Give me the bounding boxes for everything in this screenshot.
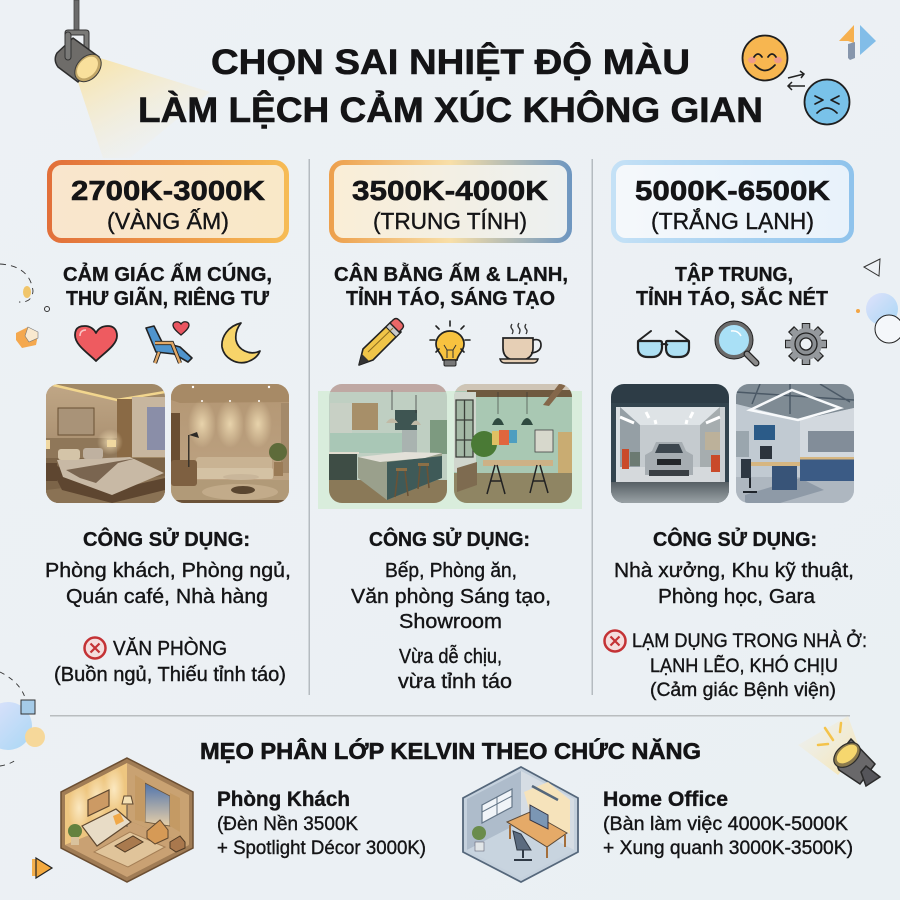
photo: cool garage — [611, 384, 729, 503]
icon: pencil — [359, 318, 404, 365]
icon: happy and unhappy faces — [742, 36, 850, 124]
column 2 usage text: Văn phòng Sáng tạo, — [351, 585, 551, 608]
icon: isometric living room — [61, 758, 193, 882]
column 2 usage text: CÔNG SỬ DỤNG: — [369, 527, 530, 551]
panel: column 3 header: (TRẮNG LẠNH) — [651, 207, 814, 234]
column 1 usage text — [45, 527, 291, 608]
living room tip text: + Spotlight Décor 3000K) — [217, 837, 426, 859]
column 1 usage text: CÔNG SỬ DỤNG: — [83, 527, 250, 551]
column 2 feeling text — [334, 262, 568, 310]
column 2 usage text: Bếp, Phòng ăn, — [385, 559, 517, 582]
icon: floor spotlight — [798, 716, 880, 786]
title — [138, 42, 763, 130]
photo: neutral studio — [454, 384, 572, 503]
column 2 note: vừa tỉnh táo — [398, 671, 512, 693]
column 3 usage text: CÔNG SỬ DỤNG: — [653, 527, 817, 551]
column 3 feeling text: TỈNH TÁO, SẮC NÉT — [636, 286, 828, 310]
icon: gear — [785, 323, 827, 365]
column 3 warning — [604, 630, 867, 701]
home office tip text: Home Office — [603, 788, 728, 811]
decoration: left cube — [16, 327, 38, 348]
panel: column 1 header — [50, 162, 286, 240]
icon: coffee cup — [500, 323, 541, 363]
column 3 warning: LẠM DỤNG TRONG NHÀ Ở: — [632, 630, 867, 652]
title: CHỌN SAI NHIỆT ĐỘ MÀU — [211, 42, 690, 82]
column 3 usage text: Nhà xưởng, Khu kỹ thuật, — [614, 559, 854, 582]
column 1 warning — [54, 637, 286, 686]
icon: magnifying glass — [715, 321, 756, 363]
panel: column 2 header: 3500K-4000K — [352, 175, 548, 206]
column 1 feeling text — [63, 262, 272, 310]
panel: column 2 header: (TRUNG TÍNH) — [373, 208, 527, 234]
column 1 usage text: Quán café, Nhà hàng — [66, 585, 268, 608]
living room tip text — [217, 788, 426, 859]
column 3 feeling text: TẬP TRUNG, — [675, 262, 793, 286]
icon: ceiling spotlight with beam — [55, 0, 210, 158]
icon: heart — [75, 326, 117, 361]
column 1 warning: (Buồn ngủ, Thiếu tỉnh táo) — [54, 664, 286, 686]
decoration: bottom left play triangle — [32, 858, 52, 878]
column 2 feeling text: CÂN BẰNG ẤM & LẠNH, — [334, 262, 568, 286]
watermark block behind column 2 photos — [318, 391, 582, 509]
column 1 feeling text: CẢM GIÁC ẤM CÚNG, — [63, 262, 272, 286]
decoration: left orbit with dot — [0, 264, 50, 312]
icon: lounge chair with heart — [146, 322, 192, 363]
icon: crescent moon — [222, 323, 260, 363]
column dividers — [50, 159, 850, 716]
photo: warm bedroom — [46, 384, 165, 503]
home office tip text: (Bàn làm việc 4000K-5000K — [603, 813, 848, 835]
photo: neutral kitchen — [329, 384, 447, 503]
icon: light bulb — [430, 321, 470, 366]
column 2 feeling text: TỈNH TÁO, SÁNG TẠO — [346, 287, 555, 310]
living room tip text: Phòng Khách — [217, 788, 350, 811]
living room tip text: (Đèn Nền 3500K — [217, 813, 358, 835]
column 2 note: Vừa dễ chịu, — [399, 645, 502, 668]
column 2 usage text — [351, 527, 551, 633]
icon: decorative diamond — [839, 25, 876, 60]
panel: column 3 header — [614, 162, 852, 240]
photo: cool workshop — [736, 384, 854, 503]
tips heading: MẸO PHÂN LỚP KELVIN THEO CHỨC NĂNG — [200, 737, 701, 764]
column 3 warning: LẠNH LẼO, KHÓ CHỊU — [650, 653, 838, 677]
column 3 feeling text — [636, 262, 828, 310]
panel: column 2 header — [332, 162, 570, 240]
panel: column 3 header: 5000K-6500K — [635, 175, 830, 206]
column 3 usage text — [614, 527, 854, 608]
title: LÀM LỆCH CẢM XÚC KHÔNG GIAN — [138, 90, 763, 130]
panel: column 1 header: (VÀNG ẤM) — [107, 207, 229, 234]
home office tip text — [603, 788, 853, 859]
column 1 warning: VĂN PHÒNG — [113, 637, 227, 660]
decoration: right triangle and circles — [856, 259, 900, 343]
home office tip text: + Xung quanh 3000K-3500K) — [603, 837, 853, 859]
icon: glasses — [638, 331, 689, 357]
column 2 usage text: Showroom — [399, 610, 502, 633]
decoration: left blob and dashed orbit — [0, 672, 45, 766]
column 1 feeling text: THƯ GIÃN, RIÊNG TƯ — [66, 286, 269, 310]
column 2 note — [398, 645, 512, 693]
column 3 usage text: Phòng học, Gara — [658, 585, 816, 608]
column 1 usage text: Phòng khách, Phòng ngủ, — [45, 559, 291, 582]
icon: isometric home office — [463, 767, 578, 882]
column 3 warning: (Cảm giác Bệnh viện) — [650, 679, 836, 701]
panel: column 1 header: 2700K-3000K — [71, 175, 265, 206]
photo: warm living room — [171, 384, 289, 503]
